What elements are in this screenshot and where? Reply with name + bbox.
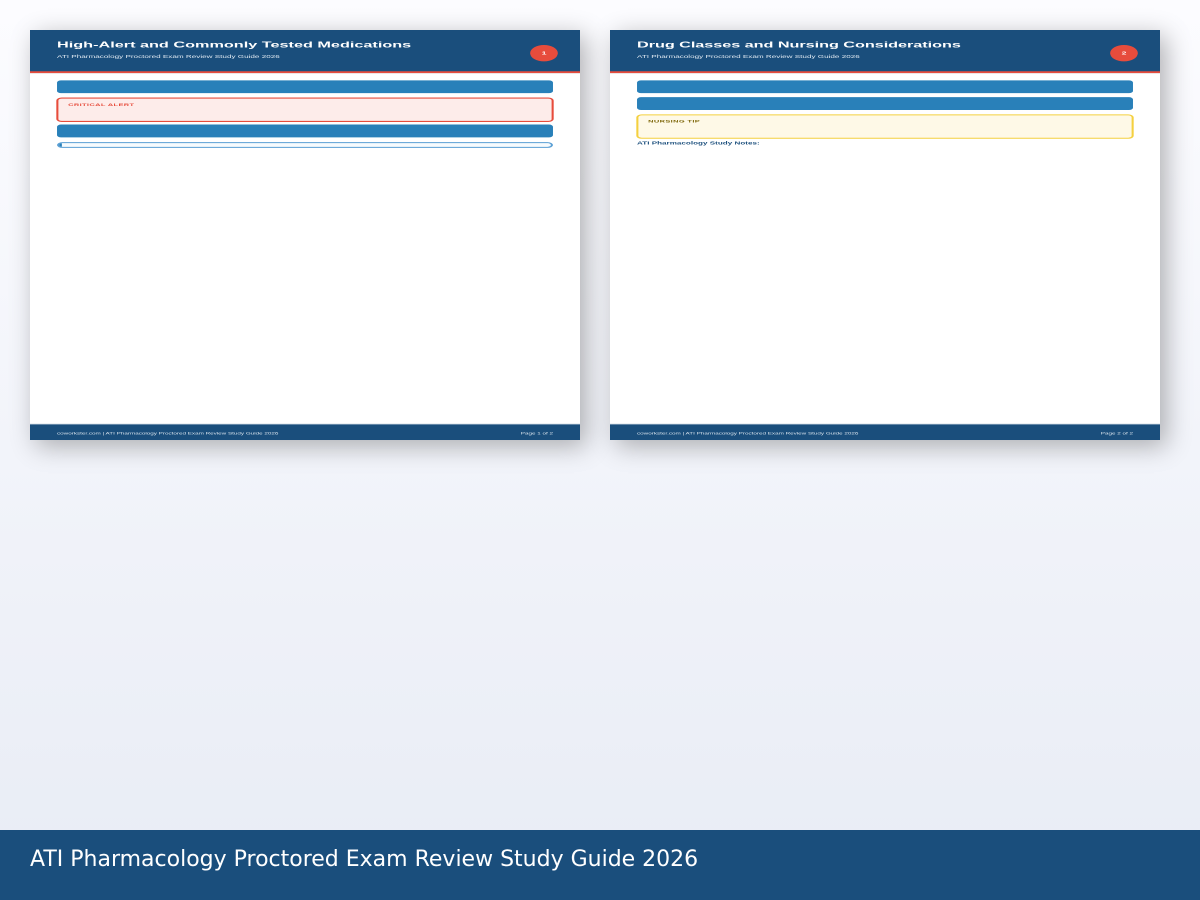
page 2 subtitle: ATI Pharmacology Proctored Exam Review Study Guide 2026 xyxy=(637,54,860,59)
section bar 1 xyxy=(57,80,553,93)
study notes heading: ATI Pharmacology Study Notes: xyxy=(637,141,760,146)
page 2 footer page number: Page 2 of 2 xyxy=(1101,432,1133,435)
page 2 title: Drug Classes and Nursing Considerations xyxy=(637,40,961,49)
progress bar fill xyxy=(59,143,62,147)
progress bar xyxy=(57,142,553,148)
critical alert label: CRITICAL ALERT xyxy=(68,103,134,107)
callout: nursing tip xyxy=(636,114,1134,139)
panel: page 2 xyxy=(610,30,1160,440)
page 2 footer xyxy=(610,424,1160,440)
callout: critical alert xyxy=(56,98,554,122)
page 2 footer source: coworkster.com | ATI Pharmacology Proctored Exam Review Study Guide 2026 xyxy=(637,432,858,435)
section bar 1 xyxy=(637,80,1133,93)
section bar 2 xyxy=(57,125,553,137)
panel: page 1 xyxy=(30,30,580,440)
section bar 2 xyxy=(637,97,1133,110)
banner title: ATI Pharmacology Proctored Exam Review Study Guide 2026 xyxy=(30,847,698,872)
page 2 number badge: 2 xyxy=(1122,50,1126,56)
page 1 footer source: coworkster.com | ATI Pharmacology Proctored Exam Review Study Guide 2026 xyxy=(57,432,278,435)
page 1 title: High-Alert and Commonly Tested Medications xyxy=(57,40,411,49)
page 1 footer page number: Page 1 of 2 xyxy=(521,432,553,435)
shadow: page 1 xyxy=(30,30,580,440)
shadow: page 2 xyxy=(610,30,1160,440)
page 2 number badge xyxy=(1110,45,1138,61)
nursing tip label: NURSING TIP xyxy=(648,119,700,124)
page 1 subtitle: ATI Pharmacology Proctored Exam Review Study Guide 2026 xyxy=(57,54,280,59)
page 1 number badge xyxy=(530,45,558,61)
page 1 footer xyxy=(30,424,580,440)
bottom title banner xyxy=(0,830,1200,900)
page 1 number badge: 1 xyxy=(542,50,546,56)
page 2 header xyxy=(610,30,1160,73)
page 1 header xyxy=(30,30,580,73)
